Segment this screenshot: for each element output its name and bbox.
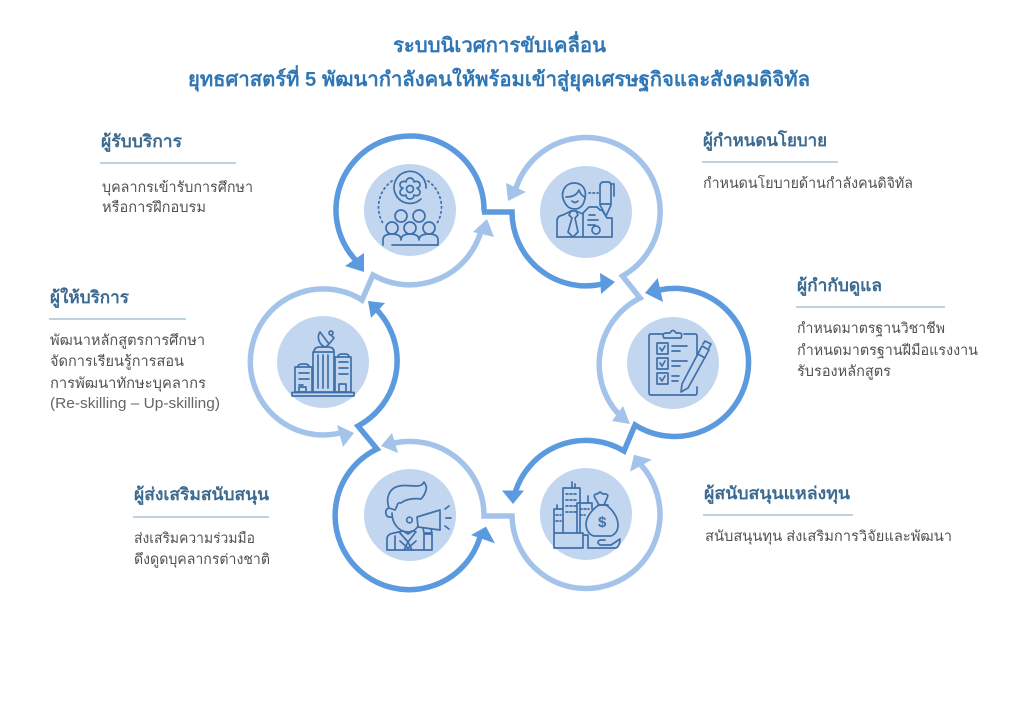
icon: money bag and buildings [540,468,632,560]
panel: ผู้ส่งเสริมสนับสนุน: ผู้ส่งเสริมสนับสนุน [134,485,269,506]
panel: ผู้รับบริการ: หรือการฝึกอบรม [102,199,206,216]
panel: ผู้กำกับดูแล: กำหนดมาตรฐานวิชาชีพ [797,320,945,337]
panel: ผู้รับบริการ: บุคลากรเข้ารับการศึกษา [102,179,253,196]
panel: ผู้ให้บริการ: พัฒนาหลักสูตรการศึกษา [50,333,205,349]
panel: ผู้ให้บริการ [49,287,220,412]
panel: ผู้สนับสนุนแหล่งทุน: ผู้สนับสนุนแหล่งทุน [704,484,850,505]
arrow: light top-left to left [250,219,494,447]
cycle arrows [250,136,749,590]
icon: policy maker [540,166,632,258]
panel: ผู้รับบริการ [100,132,253,216]
arrow: dark top-left to top-right [336,136,615,294]
panel: ผู้กำกับดูแล: รับรองหลักสูตร [797,364,891,380]
arrow: dark bottom-left to left [335,301,495,590]
title: ระบบนิเวศการขับเคลื่อน [393,30,606,57]
panel: ผู้กำหนดนโยบาย [702,130,913,192]
panel: ผู้สนับสนุนแหล่งทุน: สนับสนุนทุน ส่งเสริมการวิจัยและพัฒนา [705,529,952,545]
panel: ผู้กำหนดนโยบาย: กำหนดนโยบายด้านกำลังคนดิจิทัล [703,174,913,192]
icon: clipboard [627,317,719,409]
title [188,30,810,93]
panel: ผู้ให้บริการ: จัดการเรียนรู้การสอน [50,353,184,370]
panel: ผู้ให้บริการ: การพัฒนาทักษะบุคลากร [50,376,206,392]
panel: ผู้สนับสนุนแหล่งทุน [703,484,952,545]
arrow: light top-right to right [506,138,660,424]
panel: ผู้ส่งเสริมสนับสนุน: ดึงดูดบุคลากรต่างชาติ [134,552,270,568]
arrow: light bottom-right to bottom-left [381,433,660,588]
panel: ผู้ให้บริการ: ผู้ให้บริการ [50,287,130,309]
icon: people and gear [364,164,456,256]
panel: ผู้กำหนดนโยบาย: ผู้กำหนดนโยบาย [703,130,827,152]
icon: money bag and buildings: $ [598,514,607,531]
icon: office buildings with satellite dish [277,316,369,408]
panel: ผู้ส่งเสริมสนับสนุน: ส่งเสริมความร่วมมือ [134,530,255,547]
panel: ผู้กำกับดูแล: ผู้กำกับดูแล [797,276,882,297]
title: ยุทธศาสตร์ที่ 5 พัฒนากำลังคนให้พร้อมเข้าสู่ยุคเศรษฐกิจและสังคมดิจิทัล [188,64,810,93]
panel: ผู้ให้บริการ: (Re-skilling – Up-skilling) [50,396,220,412]
arrow: dark right to bottom-right [502,278,749,504]
panel: ผู้กำกับดูแล: กำหนดมาตรฐานฝีมือแรงงาน [797,342,978,359]
panel: ผู้กำกับดูแล [796,276,978,380]
icon: announcer with megaphone [364,469,456,561]
panel: ผู้รับบริการ: ผู้รับบริการ [101,132,183,153]
panel: ผู้ส่งเสริมสนับสนุน [133,485,270,568]
